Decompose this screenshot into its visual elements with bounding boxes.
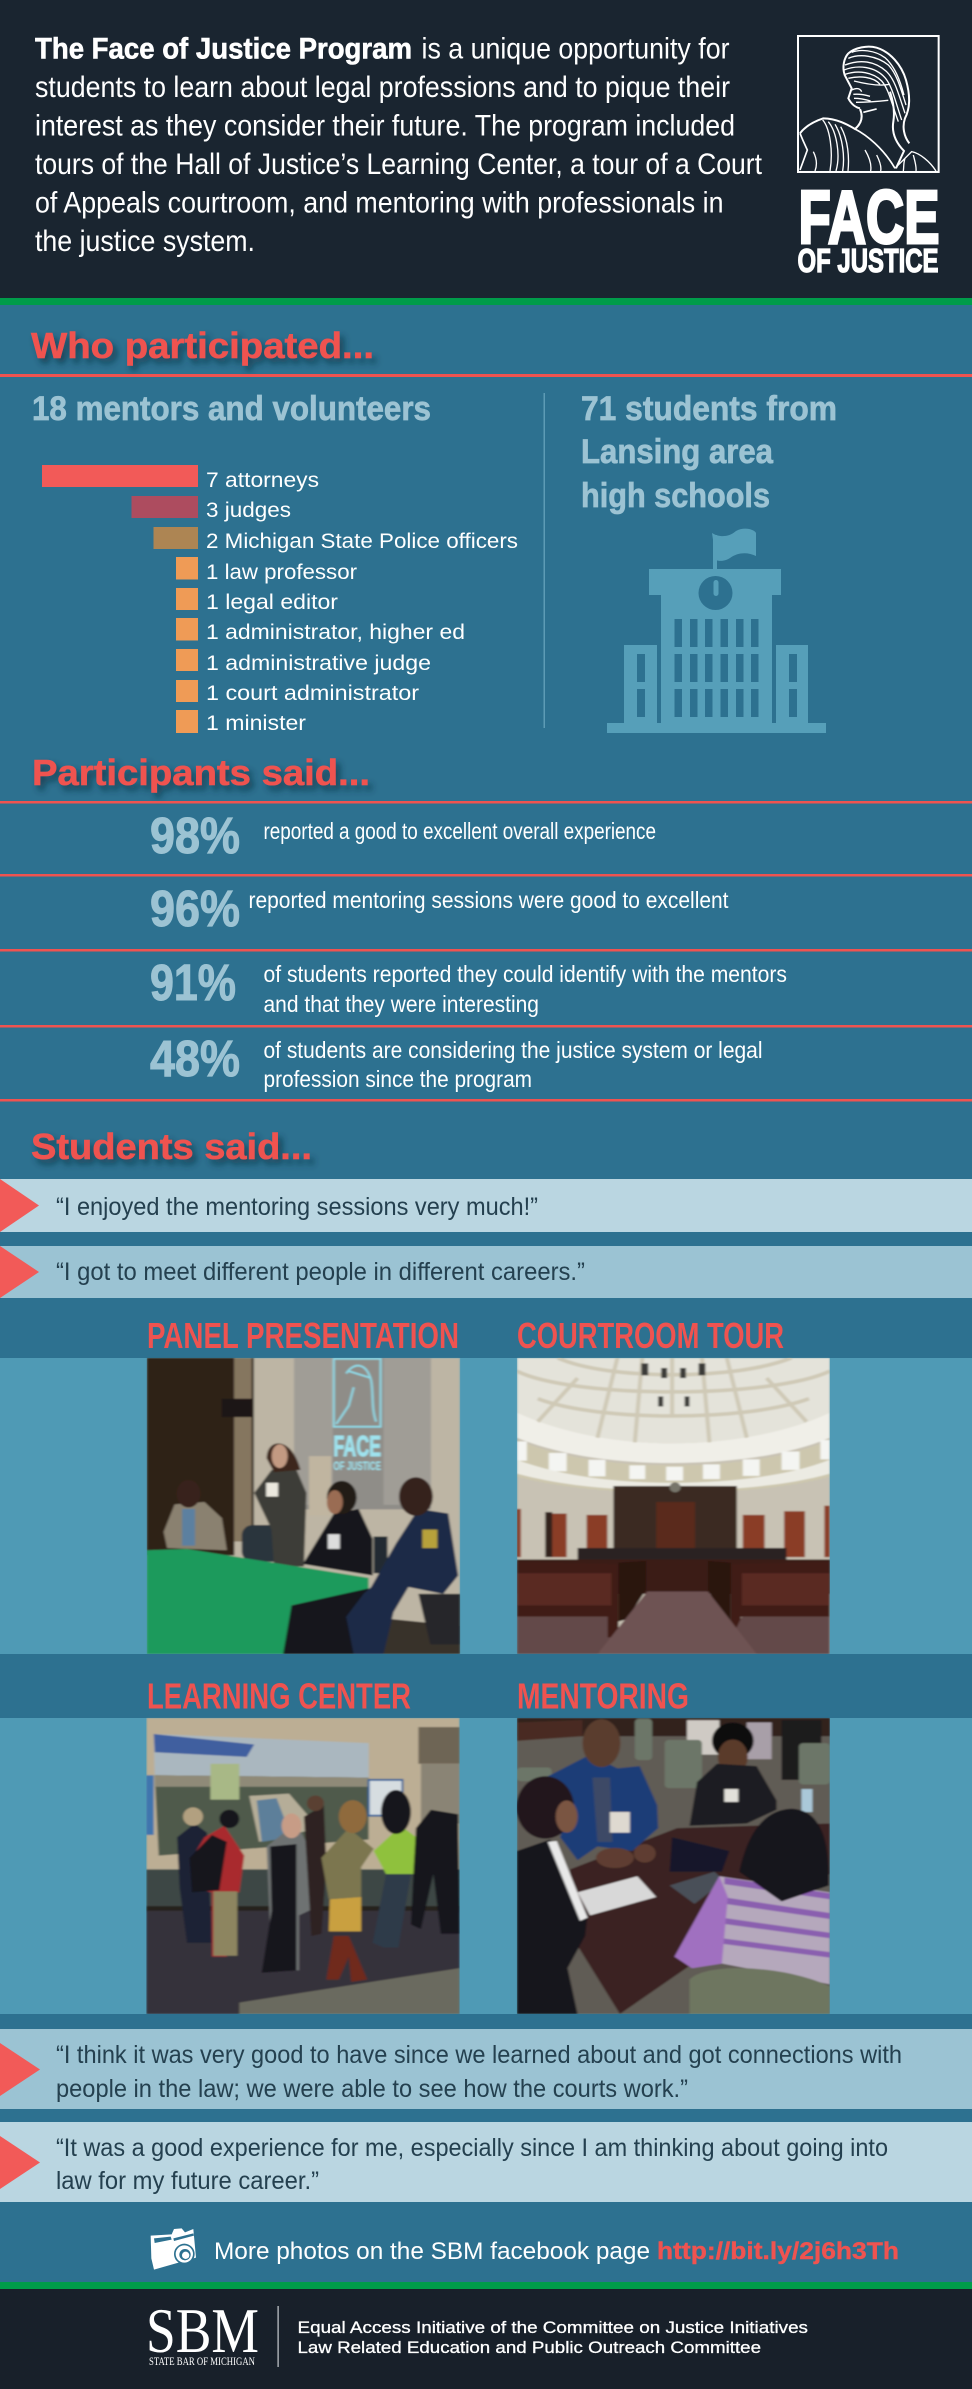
officer — [545, 1719, 658, 1868]
intro paragraph: of Appeals courtroom, and mentoring with professionals in — [35, 186, 724, 220]
students heading: Lansing area — [581, 433, 774, 471]
facebook callout — [151, 2228, 899, 2270]
panel: photo band one — [0, 1358, 972, 1654]
committee credits — [298, 2318, 808, 2357]
stat: 91 percent: 91% — [150, 954, 236, 1011]
photo: mentoring — [516, 1718, 830, 2014]
quote: connections with people in the law: people in the law; we were able to see how the courts work.” — [56, 2075, 688, 2103]
woman standing — [254, 1443, 306, 1566]
quote: different careers: “I got to meet different people in different careers.” — [56, 1258, 585, 1286]
bar chart: mentors by profession — [42, 465, 518, 735]
bar chart: mentors by profession: 1 legal editor — [206, 590, 338, 614]
stat: 96 percent: 96% — [150, 880, 240, 937]
bar chart: mentors by profession: 1 law professor — [206, 560, 357, 584]
mentors heading: 18 mentors and volunteers — [32, 390, 431, 428]
dome ceiling — [517, 1358, 830, 1463]
bar chart: mentors by profession: 3 judges — [206, 498, 291, 522]
stat: 48 percent: of students are considering the justice system or legal — [264, 1037, 762, 1063]
stat: 96 percent — [150, 880, 729, 937]
benches — [517, 1559, 830, 1638]
bar chart: mentors by profession: 1 minister — [206, 711, 306, 735]
quote: future career — [0, 2122, 972, 2202]
green table — [147, 1549, 369, 1654]
quote: mentoring sessions — [0, 1179, 972, 1232]
quote: connections with people in the law: “I think it was very good to have since we learned about and got connections with — [56, 2041, 902, 2069]
stat: 98 percent: 98% — [150, 807, 240, 864]
stat: 91 percent: and that they were interesting — [264, 991, 539, 1017]
officer — [346, 1477, 460, 1654]
stat: 96 percent: reported mentoring sessions were good to excellent — [248, 887, 729, 913]
quote: future career: law for my future career.” — [56, 2167, 319, 2195]
heading: Who participated: Who participated... — [31, 325, 374, 366]
intro paragraph: is a unique opportunity for — [422, 32, 730, 66]
bar chart: mentors by profession: 1 administrator, higher ed — [206, 620, 465, 644]
panel: mentors and volunteers — [32, 390, 518, 735]
panel: students — [581, 390, 837, 733]
intro paragraph: interest as they consider their future. The program included — [35, 110, 735, 142]
quote: mentoring sessions: “I enjoyed the mentoring sessions very much!” — [56, 1193, 538, 1221]
icon: school building — [607, 529, 826, 733]
heading: Who participated — [0, 325, 972, 377]
header panel — [0, 0, 972, 305]
logo: State Bar of Michigan: SBM — [146, 2296, 259, 2366]
round table — [570, 1823, 830, 2014]
photo: courtroom tour — [517, 1358, 830, 1654]
man seated left — [164, 1480, 227, 1550]
logo: Face of Justice — [798, 36, 940, 279]
man in suit — [303, 1481, 373, 1576]
heading: Students said: Students said... — [31, 1126, 312, 1167]
heading: courtroom tour: COURTROOM TOUR — [517, 1315, 784, 1356]
heading: panel presentation: PANEL PRESENTATION — [147, 1315, 459, 1356]
intro paragraph — [35, 32, 763, 258]
quote: connections with people in the law — [0, 2029, 972, 2109]
heading: Participants said: Participants said... — [32, 752, 370, 793]
bar chart: mentors by profession: 7 attorneys — [206, 468, 319, 492]
students heading: high schools — [581, 477, 770, 515]
quote: future career: “It was a good experience for me, especially since I am thinking about going into — [56, 2134, 888, 2162]
bar chart: mentors by profession: 1 administrative judge — [206, 651, 431, 675]
mural — [154, 1734, 369, 1856]
stat: 48 percent — [150, 1030, 762, 1092]
intro paragraph: students to learn about legal professions and to pique their — [35, 71, 730, 104]
students heading — [581, 390, 837, 515]
stat: 91 percent — [150, 954, 787, 1017]
carpet floor — [146, 1911, 460, 2014]
students heading: 71 students from — [581, 390, 837, 428]
woman in black — [690, 1722, 777, 1826]
photo: panel presentation — [147, 1358, 460, 1654]
stat: 48 percent: 48% — [150, 1030, 240, 1087]
stat: 48 percent: profession since the program — [264, 1066, 532, 1092]
group of visitors — [177, 1790, 460, 1982]
intro paragraph: The Face of Justice Program — [35, 32, 412, 66]
logo: State Bar of Michigan: STATE BAR OF MICHIGAN — [149, 2356, 256, 2368]
stat: 98 percent — [150, 807, 656, 864]
stat: 91 percent: of students reported they could identify with the mentors — [264, 961, 787, 987]
carpet — [517, 1592, 830, 1654]
icon: camera — [151, 2228, 196, 2270]
student in striped top — [675, 1809, 830, 1984]
committee credits: Law Related Education and Public Outreach Committee — [298, 2338, 761, 2357]
panel: photo band two — [0, 1718, 972, 2014]
facebook callout: More photos on the SBM facebook page — [214, 2238, 650, 2265]
bar chart: mentors by profession: 2 Michigan State Police officers — [206, 529, 518, 553]
committee credits: Equal Access Initiative of the Committee on Justice Initiatives — [298, 2318, 808, 2337]
intro paragraph: tours of the Hall of Justice’s Learning Center, a tour of a Court — [35, 148, 763, 181]
quote: different careers — [0, 1246, 972, 1298]
photo: learning center — [146, 1718, 460, 2014]
intro paragraph: the justice system. — [35, 225, 255, 258]
student left — [516, 1776, 588, 2014]
photo: panel presentation: OF JUSTICE — [333, 1459, 381, 1473]
stat: 98 percent: reported a good to excellent overall experience — [264, 818, 656, 844]
footer panel — [0, 2282, 972, 2389]
bar chart: mentors by profession: 1 court administrator — [206, 681, 419, 705]
facebook callout: http://bit.ly/2j6h3Th — [657, 2238, 899, 2265]
photo: panel presentation: FACE — [333, 1431, 381, 1463]
heading: learning center: LEARNING CENTER — [147, 1676, 411, 1716]
panel: survey results — [0, 807, 972, 1102]
heading: mentoring: MENTORING — [517, 1676, 689, 1716]
